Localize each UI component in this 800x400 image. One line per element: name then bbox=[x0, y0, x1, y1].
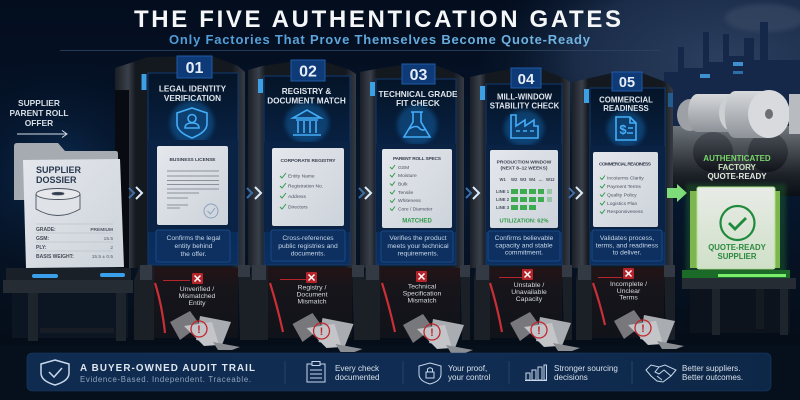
document: commercial readiness: Responsiveness bbox=[607, 209, 643, 215]
gate heading bbox=[599, 96, 653, 113]
document: parent roll specs: Bulk bbox=[398, 182, 408, 188]
gate heading: REGISTRY & bbox=[282, 87, 331, 96]
document: parent roll specs: Whiteness bbox=[398, 198, 421, 204]
reject label bbox=[297, 284, 328, 306]
document: corporate registry: Directors bbox=[288, 204, 308, 210]
reject label: Entity bbox=[188, 300, 206, 307]
reject bay 2 bbox=[250, 265, 364, 352]
reject label: Mismatch bbox=[297, 298, 327, 306]
gate heading: STABILITY CHECK bbox=[490, 102, 560, 110]
document: production window: LINE 2 bbox=[496, 197, 510, 202]
icon: priced document bbox=[607, 111, 645, 147]
audit trail heading: A BUYER-OWNED AUDIT TRAIL bbox=[80, 363, 255, 374]
reject label: Unstable / bbox=[514, 282, 544, 289]
rejected papers: ! bbox=[430, 327, 434, 339]
number badge bbox=[511, 68, 541, 88]
rejected papers: ! bbox=[641, 323, 645, 335]
document: parent roll specs bbox=[382, 149, 452, 228]
document: production window: (NEXT 8–12 WEEKS) bbox=[501, 166, 548, 172]
document: parent roll specs: Core / Diameter bbox=[398, 206, 433, 212]
icon: shield with person bbox=[170, 101, 214, 145]
gate heading: DOCUMENT MATCH bbox=[267, 96, 346, 106]
intro label: supplier offer bbox=[10, 98, 68, 128]
document: commercial readiness: COMMERCIAL READINESS bbox=[599, 162, 652, 168]
inner panel bbox=[486, 84, 562, 265]
document frame bbox=[590, 146, 665, 232]
document frame bbox=[264, 142, 350, 232]
supplier label: SUPPLIER bbox=[718, 252, 757, 261]
document: parent roll specs: Moisture bbox=[398, 173, 417, 179]
document: commercial readiness: Logistics Plan bbox=[607, 201, 637, 207]
description: the offer. bbox=[181, 251, 207, 258]
document: commercial readiness: Incoterms Clarity bbox=[607, 176, 644, 182]
benefit: your proof, your control bbox=[419, 363, 490, 384]
gate 4: mill-window stability check bbox=[470, 68, 570, 268]
reject label bbox=[403, 284, 441, 304]
icon: flask bbox=[397, 105, 437, 145]
frame bbox=[470, 69, 570, 268]
gate heading: LEGAL IDENTITY bbox=[159, 84, 227, 94]
reject label: Terms bbox=[619, 294, 638, 302]
inner panel bbox=[148, 73, 238, 265]
panel: quote-ready supplier bbox=[682, 184, 790, 278]
document: business license: BUSINESS LICENSE bbox=[170, 157, 216, 163]
paper rolls bbox=[673, 90, 800, 196]
description bbox=[488, 231, 560, 261]
chevron: to gate 5 bbox=[569, 187, 582, 199]
document: production window: W2 bbox=[511, 177, 518, 182]
gate heading: VERIFICATION bbox=[164, 94, 221, 103]
document: parent roll specs: GSM bbox=[398, 165, 409, 171]
gate 2: registry and document match bbox=[248, 60, 356, 268]
gate heading: MILL-WINDOW bbox=[497, 92, 553, 102]
benefit: your proof, your control: your control bbox=[448, 373, 490, 382]
description: to deliver. bbox=[613, 250, 641, 256]
description bbox=[156, 230, 230, 262]
number badge: 02 bbox=[299, 64, 317, 80]
stand under dossier bbox=[3, 268, 133, 341]
inner panel bbox=[376, 79, 456, 265]
benefit: every check documented: Every check bbox=[335, 364, 380, 373]
description: Verifies the product bbox=[389, 235, 447, 242]
reject label: Technical bbox=[408, 284, 437, 290]
reject label: Unverified / bbox=[180, 286, 214, 293]
spec table: GSM: bbox=[36, 236, 49, 242]
icon: priced document: $ bbox=[619, 122, 627, 137]
authenticated heading bbox=[703, 154, 771, 181]
document: production window: LINE 3 bbox=[496, 205, 510, 210]
description: Confirms the legal bbox=[167, 235, 221, 242]
document: corporate registry: Entity Name bbox=[288, 174, 315, 180]
reject label: Mismatch bbox=[407, 298, 437, 304]
document: production window: PRODUCTION WINDOW bbox=[497, 160, 552, 166]
reject label: Unavailable bbox=[511, 289, 547, 296]
spec table: 15.5 bbox=[104, 236, 113, 242]
document frame bbox=[376, 144, 456, 232]
frame bbox=[572, 73, 673, 268]
description: Confirms believable bbox=[495, 235, 554, 242]
number badge: 05 bbox=[619, 75, 635, 91]
rejected papers: ! bbox=[537, 325, 541, 337]
document: parent roll specs: Tensile bbox=[398, 190, 414, 196]
document: corporate registry: Registration No. bbox=[288, 184, 323, 190]
arrow: to authenticated supplier bbox=[667, 184, 687, 202]
arrow: offer into dossier bbox=[17, 130, 67, 138]
reject bay 1 bbox=[134, 265, 250, 350]
icon: factory bbox=[504, 110, 544, 146]
description bbox=[381, 231, 453, 262]
gate 3: technical grade fit check bbox=[360, 64, 464, 268]
reject label: Capacity bbox=[516, 296, 543, 303]
reject marker bbox=[306, 272, 317, 283]
benefit: stronger sourcing decisions: Stronger sourcing bbox=[554, 364, 618, 373]
dossier heading: DOSSIER bbox=[36, 175, 77, 185]
reject bay 5 bbox=[576, 265, 684, 349]
number badge bbox=[612, 72, 642, 91]
spec table: PREMIUM bbox=[90, 227, 113, 233]
spec table: 2 bbox=[110, 245, 113, 251]
document frame bbox=[148, 140, 238, 232]
gate heading bbox=[159, 84, 227, 103]
factory skyline bbox=[664, 4, 800, 130]
document: commercial readiness: Quality Policy bbox=[607, 192, 637, 198]
subtitle: Only Factories That Prove Themselves Become Quote-Ready bbox=[169, 32, 591, 47]
spec table: PLY: bbox=[36, 245, 47, 251]
chevron: to gate 1 bbox=[129, 187, 142, 199]
spec table: BASIS WEIGHT: bbox=[36, 254, 74, 260]
description: public registries and bbox=[278, 243, 338, 250]
reject label bbox=[511, 282, 547, 303]
number badge: 03 bbox=[410, 67, 428, 84]
stand under quote-ready supplier bbox=[682, 278, 796, 335]
description: documents. bbox=[291, 250, 325, 258]
benefit: every check documented: documented bbox=[335, 373, 380, 382]
benefit: stronger sourcing decisions: decisions bbox=[554, 373, 588, 382]
document: parent roll specs: MATCHED bbox=[402, 218, 432, 224]
description: capacity and stable bbox=[495, 242, 553, 250]
intro label: supplier offer: PARENT ROLL bbox=[10, 108, 68, 118]
document: production window: W4 bbox=[529, 177, 536, 182]
gate heading: FIT CHECK bbox=[396, 99, 440, 108]
gate heading: COMMERCIAL bbox=[599, 96, 653, 104]
number badge: 01 bbox=[186, 60, 204, 77]
benefit: better suppliers, better outcomes bbox=[646, 364, 743, 382]
chevron: to gate 2 bbox=[247, 187, 261, 199]
description: requirements. bbox=[398, 250, 439, 258]
rejected papers: ! bbox=[320, 326, 323, 338]
reject label: Registry / bbox=[298, 284, 326, 292]
benefit: better suppliers, better outcomes: Better outcomes. bbox=[682, 373, 743, 382]
authenticated heading: FACTORY bbox=[718, 163, 757, 172]
description bbox=[592, 230, 662, 261]
frame bbox=[360, 65, 464, 268]
gate 1: legal identity verification bbox=[115, 56, 245, 268]
description: commitment. bbox=[505, 250, 543, 256]
audit trail heading: Evidence-Based. Independent. Traceable. bbox=[80, 375, 251, 384]
spec table: GRADE: bbox=[36, 227, 56, 233]
supplier label bbox=[708, 243, 767, 261]
document: parent roll specs: PARENT ROLL SPECS bbox=[393, 156, 442, 162]
document: production window bbox=[490, 150, 558, 228]
document: business license bbox=[157, 146, 228, 225]
benefit: stronger sourcing decisions bbox=[525, 364, 618, 382]
document: production window: LINE 1 bbox=[496, 189, 510, 194]
document: production window: W12 bbox=[546, 177, 555, 182]
title: THE FIVE AUTHENTICATION GATES bbox=[134, 6, 621, 33]
reject label: Specification bbox=[403, 290, 441, 298]
reject label: Document bbox=[297, 292, 328, 298]
number badge bbox=[402, 64, 435, 84]
frame bbox=[248, 62, 356, 268]
reject marker bbox=[192, 273, 203, 284]
frame bbox=[115, 56, 245, 268]
number badge bbox=[177, 56, 212, 78]
reject marker bbox=[416, 271, 427, 282]
benefit: your proof, your control: Your proof, bbox=[448, 364, 487, 373]
document: production window: W3 bbox=[520, 177, 527, 182]
document: production window: ... bbox=[539, 177, 542, 182]
document frame bbox=[486, 145, 562, 232]
gate heading bbox=[378, 90, 458, 108]
spec table bbox=[36, 224, 113, 260]
benefit: every check documented bbox=[307, 362, 380, 382]
reject bay 3 bbox=[364, 265, 473, 353]
folder back bbox=[14, 143, 118, 200]
reject bay 4 bbox=[474, 265, 580, 351]
description: Validates process, bbox=[600, 235, 654, 242]
icon: shield with check bbox=[41, 360, 69, 385]
reject label bbox=[179, 286, 216, 307]
description: terms, and readiness bbox=[596, 242, 659, 250]
document: production window: W1 bbox=[500, 177, 506, 182]
gate heading: TECHNICAL GRADE bbox=[378, 90, 458, 99]
authenticated heading: AUTHENTICATED bbox=[703, 154, 771, 163]
dossier sheet bbox=[23, 159, 124, 268]
icon: green check bbox=[720, 206, 754, 240]
gate heading bbox=[267, 87, 346, 106]
panel: supplier dossier bbox=[14, 143, 124, 268]
number badge bbox=[291, 60, 325, 81]
reject label: Incomplete / bbox=[610, 281, 647, 288]
panel: buyer-owned audit trail bar bbox=[27, 353, 771, 391]
document: production window: UTILIZATION: 62% bbox=[500, 218, 549, 224]
description bbox=[271, 230, 345, 261]
spec table: 15.5 ± 0.5 bbox=[92, 254, 113, 260]
chevron: to gate 3 bbox=[359, 187, 371, 199]
dossier heading: SUPPLIER bbox=[36, 165, 82, 175]
dossier heading bbox=[36, 165, 82, 185]
number badge: 04 bbox=[518, 71, 535, 88]
reject label: Unclear bbox=[617, 288, 641, 295]
description: Cross-references bbox=[282, 235, 334, 242]
reject marker bbox=[522, 269, 533, 280]
icon: institution bbox=[285, 103, 329, 143]
inner panel bbox=[590, 88, 665, 265]
reject label: Mismatched bbox=[179, 293, 216, 300]
authenticated heading: QUOTE-READY bbox=[707, 172, 767, 181]
chevron: to gate 4 bbox=[466, 187, 479, 199]
description: entity behind bbox=[175, 243, 213, 250]
gate heading bbox=[490, 92, 560, 110]
document: corporate registry: Address bbox=[288, 194, 306, 200]
intro label: supplier offer: SUPPLIER bbox=[18, 98, 60, 108]
icon: paper roll bbox=[36, 188, 80, 216]
document: corporate registry: CORPORATE REGISTRY bbox=[280, 158, 336, 164]
supplier label: QUOTE-READY bbox=[708, 243, 767, 252]
benefit: better suppliers, better outcomes: Better suppliers. bbox=[682, 364, 740, 373]
reject marker bbox=[623, 268, 634, 279]
document: commercial readiness: Payment Terms bbox=[607, 184, 641, 190]
description: meets your technical bbox=[387, 243, 449, 250]
inner panel bbox=[264, 76, 350, 265]
gate heading: READINESS bbox=[603, 104, 649, 113]
gate 5: commercial readiness bbox=[572, 72, 673, 268]
audit trail heading bbox=[80, 363, 255, 384]
document: corporate registry bbox=[272, 148, 344, 226]
intro label: supplier offer: OFFER bbox=[25, 118, 53, 128]
document: commercial readiness bbox=[593, 152, 658, 227]
rejected papers: ! bbox=[197, 324, 201, 336]
reject label bbox=[610, 281, 647, 302]
